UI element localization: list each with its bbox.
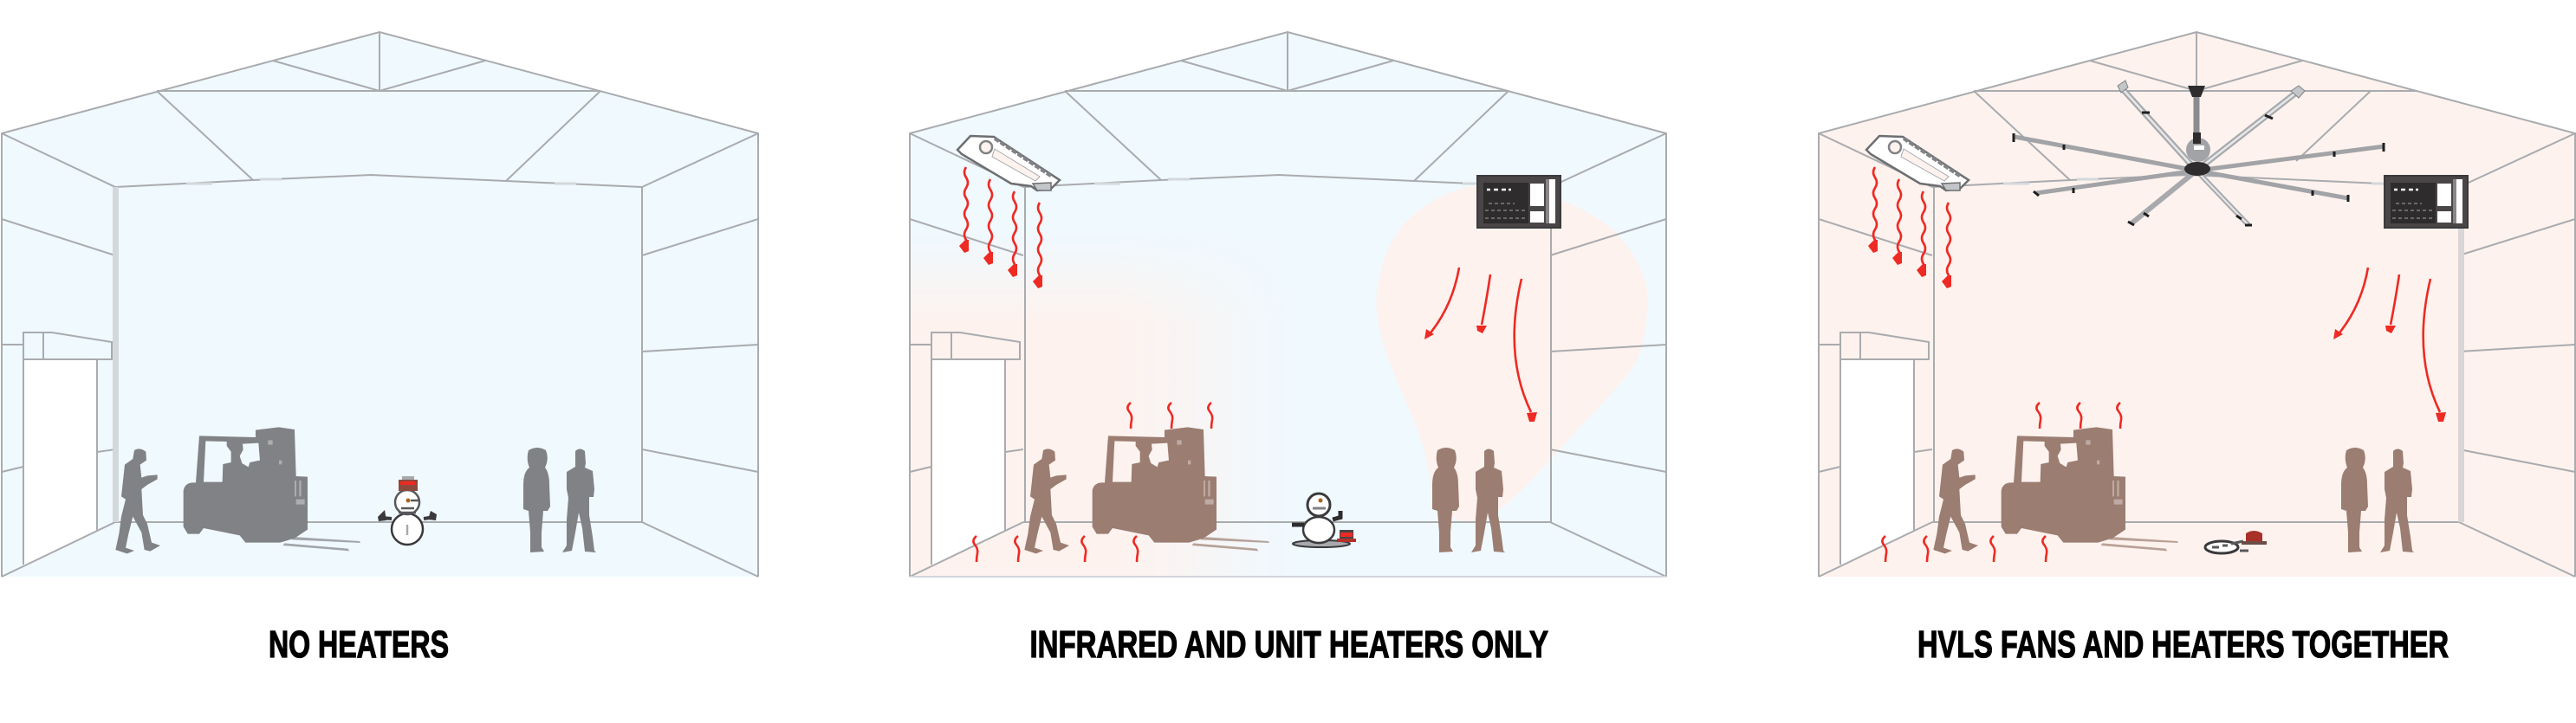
snowman xyxy=(378,476,437,545)
ceiling right diagonal xyxy=(2296,91,2371,161)
warm area from infrared heater xyxy=(911,274,1213,576)
unit heater xyxy=(2385,176,2468,228)
building fill: cold xyxy=(910,32,1666,577)
unit heater airflow arrows xyxy=(1424,268,1537,422)
building structure lines xyxy=(2,32,758,577)
rising heat squiggles xyxy=(1882,403,2121,562)
floor front edge xyxy=(910,576,1666,578)
panel: HVLS fans and heaters together xyxy=(1818,32,2575,666)
caption: infrared and unit heaters only: INFRARED AND UNIT HEATERS ONLY xyxy=(1029,623,1548,666)
panel: no heaters xyxy=(2,32,758,666)
forklift xyxy=(1093,427,1269,551)
panel: infrared and unit heaters only xyxy=(910,32,1666,666)
HVLS fan xyxy=(2014,81,2385,225)
two standing people xyxy=(523,448,596,552)
rising heat squiggles xyxy=(973,403,1212,562)
building structure lines xyxy=(910,32,1666,577)
forklift xyxy=(184,427,360,551)
back wall left edge xyxy=(1933,187,1935,522)
building fill: cold xyxy=(2,32,758,577)
melted snowman puddle and hat xyxy=(2205,531,2267,553)
infrared heater xyxy=(1866,136,1969,190)
infrared heat arrows xyxy=(959,167,1042,288)
forklift xyxy=(2002,427,2178,551)
back wall edges xyxy=(1025,187,1551,522)
ceiling right diagonal xyxy=(506,91,600,181)
caption: no heaters: NO HEATERS xyxy=(269,623,449,666)
unit heater airflow arrows xyxy=(2333,268,2446,422)
back wall right edge xyxy=(641,187,643,522)
infrared heater xyxy=(957,136,1060,190)
back wall left edge xyxy=(113,187,119,522)
building fill: warm xyxy=(1818,32,2574,577)
worker walking xyxy=(115,449,160,553)
two standing people xyxy=(2341,448,2414,552)
melting snowman xyxy=(1292,494,1356,547)
unit heater xyxy=(1477,176,1561,228)
building structure lines xyxy=(1819,32,2575,577)
infrared heat arrows xyxy=(1868,167,1951,288)
worker walking xyxy=(1024,449,1069,553)
warm area from unit heater xyxy=(1376,184,1648,522)
back wall right edge xyxy=(2458,229,2464,522)
two standing people xyxy=(1432,448,1505,552)
worker walking xyxy=(1933,449,1978,553)
ceiling right diagonal xyxy=(1414,91,1509,181)
